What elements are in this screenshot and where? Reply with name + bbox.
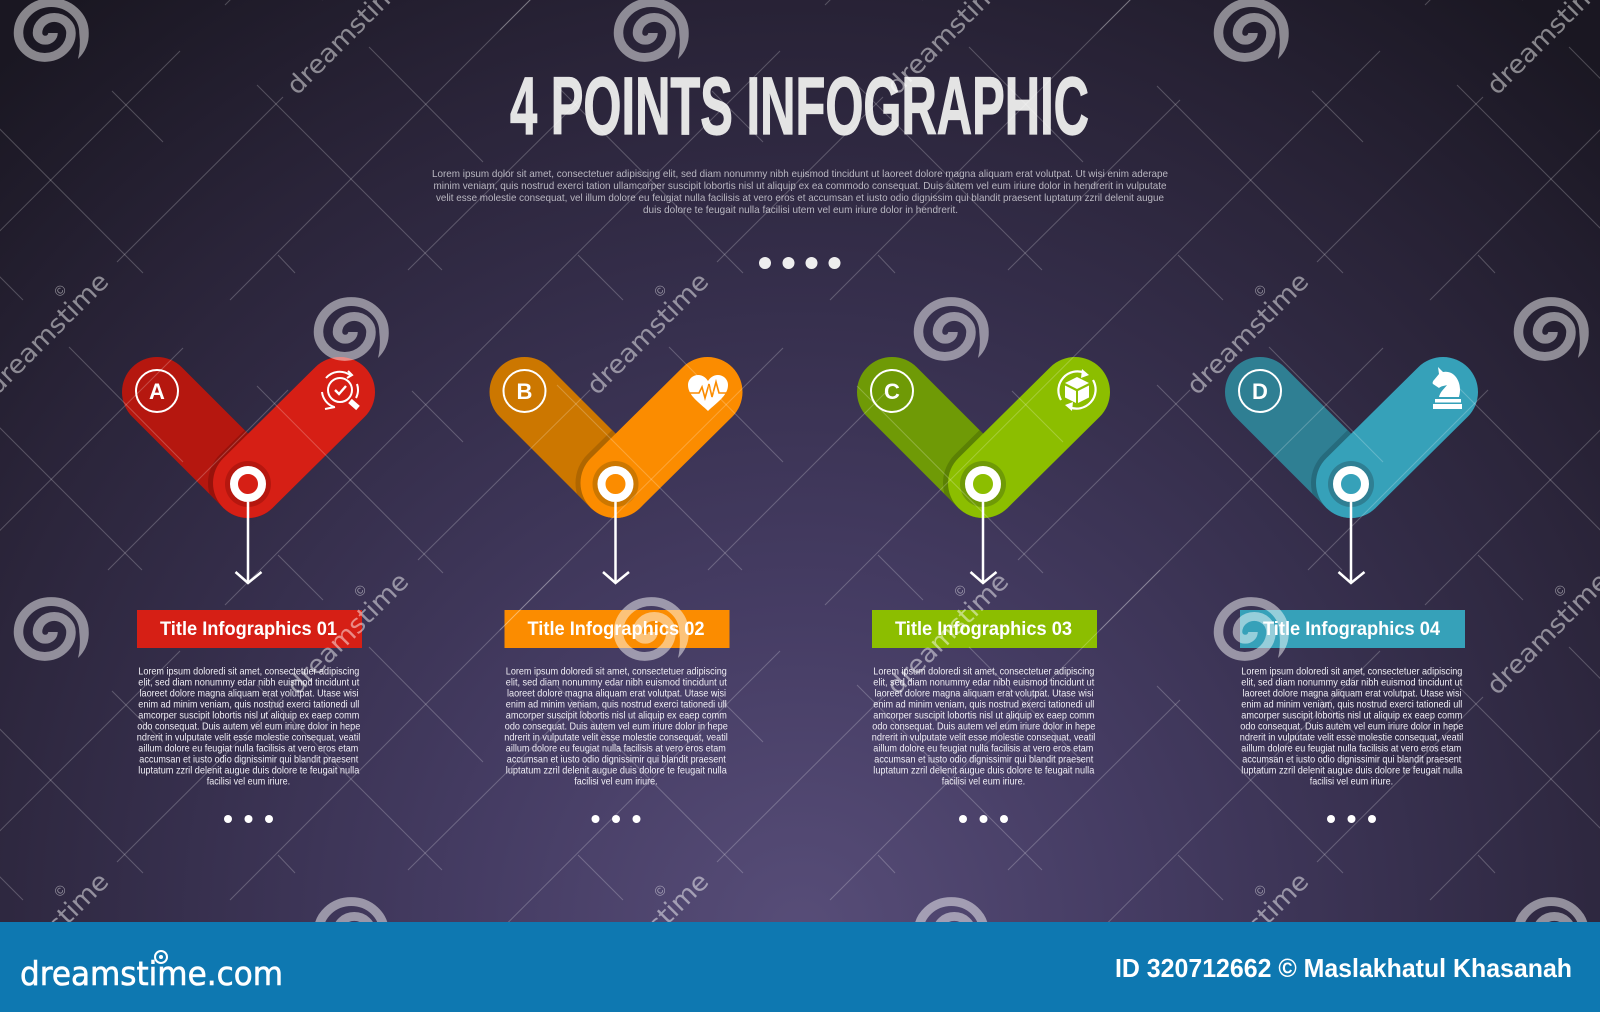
intro text block bbox=[432, 168, 1168, 216]
badge D bbox=[1239, 370, 1281, 412]
badge A: A bbox=[149, 379, 165, 404]
text block A: ndrerit in vulputate velit esse molestie consequat, veatil bbox=[137, 732, 360, 744]
text block C: luptatum zzril delenit augue duis dolore te feugait nulla bbox=[873, 766, 1095, 776]
watermark overlay: © bbox=[51, 281, 70, 300]
text block C: amcorper suscipit lobortis nisl ut aliquip ex eaep comm bbox=[873, 710, 1094, 722]
text block D: ndrerit in vulputate velit esse molestie consequat, veatil bbox=[1240, 732, 1463, 744]
text block B: odo consequat. Duis autem vel eum iriure dolor in hepe bbox=[505, 722, 728, 732]
icon: chess knight bbox=[1433, 367, 1462, 409]
panel: point A bbox=[136, 370, 362, 823]
dots D bbox=[1327, 815, 1376, 823]
intro text block: velit esse molestie consequat, vel illum dolore eu feugiat nulla facilisis at vero eros et accumsan et iusto odio dignissim qui blandit praesent luptatum zzril delenit augue bbox=[436, 192, 1164, 204]
watermark overlay: © bbox=[1251, 281, 1270, 300]
text block C: laoreet dolore magna aliquam erat volutpat. Utase wisi bbox=[874, 688, 1094, 700]
badge B: B bbox=[517, 379, 532, 404]
text block A: Lorem ipsum doloredi sit amet, consectetuer adipiscing bbox=[138, 666, 360, 678]
dots B bbox=[592, 815, 640, 823]
top dots bbox=[759, 257, 840, 269]
heading D bbox=[1240, 610, 1465, 648]
V shape D bbox=[1260, 392, 1443, 507]
intro text block: duis dolore te feugait nulla facilisi utem vel eum iriure dolor in hendrerit. bbox=[643, 204, 958, 216]
text block A: elit, sed diam nonummy edar nibh euismod tincidunt ut bbox=[138, 678, 359, 688]
text block A: luptatum zzril delenit augue duis dolore te feugait nulla bbox=[138, 766, 360, 776]
text block C bbox=[872, 666, 1096, 788]
text block B: Lorem ipsum doloredi sit amet, consectetuer adipiscing bbox=[506, 666, 727, 678]
watermark overlay: dreamstime bbox=[581, 267, 714, 400]
footer credit: ID 320712662 © Maslakhatul Khasanah bbox=[1115, 953, 1572, 983]
watermark overlay: © bbox=[651, 881, 670, 900]
text block D: laoreet dolore magna aliquam erat volutpat. Utase wisi bbox=[1242, 688, 1462, 700]
dots A bbox=[224, 815, 273, 823]
arrow D bbox=[1338, 502, 1364, 583]
panel: point C bbox=[871, 369, 1097, 823]
watermark overlay: dreamstime bbox=[1181, 267, 1314, 400]
heading B bbox=[504, 610, 730, 648]
text block D: Lorem ipsum doloredi sit amet, consectetuer adipiscing bbox=[1241, 666, 1463, 678]
text block D: luptatum zzril delenit augue duis dolore te feugait nulla bbox=[1241, 766, 1463, 776]
badge B bbox=[504, 370, 546, 412]
badge C: C bbox=[884, 379, 900, 404]
text block C: facilisi vel eum iriure. bbox=[942, 776, 1025, 788]
text block A: aillum dolore eu feugiat nulla facilisis at vero eros etam bbox=[138, 744, 358, 754]
text block A: accumsan et iusto odio dignissimir qui blandit praesent bbox=[139, 754, 358, 766]
text block C: ndrerit in vulputate velit esse molestie consequat, veatil bbox=[872, 732, 1095, 744]
panel: point B bbox=[504, 370, 730, 823]
watermark overlay: dreamstime bbox=[281, 567, 414, 700]
text block D: facilisi vel eum iriure. bbox=[1310, 776, 1393, 788]
text block B: ndrerit in vulputate velit esse molestie consequat, veatil bbox=[504, 732, 728, 744]
watermark overlay: © bbox=[51, 881, 70, 900]
watermark overlay: © bbox=[351, 581, 370, 600]
text block B bbox=[504, 666, 728, 788]
watermark overlay: © bbox=[651, 281, 670, 300]
arrow C bbox=[970, 502, 996, 583]
text block C: odo consequat. Duis autem vel eum iriure dolor in hepe bbox=[872, 722, 1096, 732]
panel: point D bbox=[1239, 367, 1465, 823]
text block A: facilisi vel eum iriure. bbox=[207, 776, 290, 788]
watermark overlay: © bbox=[1551, 581, 1570, 600]
footer logo: dreamstime.com bbox=[20, 954, 283, 993]
icon: heart with pulse bbox=[688, 375, 728, 411]
heading B: Title Infographics 02 bbox=[528, 619, 704, 640]
text block D: amcorper suscipit lobortis nisl ut aliquip ex eaep comm bbox=[1241, 710, 1462, 722]
V shape A bbox=[157, 392, 340, 507]
text block D: odo consequat. Duis autem vel eum iriure dolor in hepe bbox=[1240, 722, 1464, 732]
arrow A bbox=[236, 502, 262, 583]
text block D bbox=[1240, 666, 1464, 788]
text block D: elit, sed diam nonummy edar nibh euismod tincidunt ut bbox=[1241, 678, 1462, 688]
text block A: enim ad minim veniam, quis nostrud exerci tationedi ull bbox=[138, 700, 359, 710]
watermark overlay: dreamstime bbox=[881, 567, 1014, 700]
arrow B bbox=[603, 502, 629, 583]
text block A: odo consequat. Duis autem vel eum iriure dolor in hepe bbox=[137, 722, 361, 732]
watermark overlay: dreamstime bbox=[1181, 867, 1314, 1000]
text block D: aillum dolore eu feugiat nulla facilisis at vero eros etam bbox=[1241, 744, 1461, 754]
text block B: laoreet dolore magna aliquam erat volutpat. Utase wisi bbox=[507, 688, 726, 700]
text block C: aillum dolore eu feugiat nulla facilisis at vero eros etam bbox=[873, 744, 1093, 754]
badge A bbox=[136, 370, 178, 412]
heading A bbox=[137, 610, 362, 648]
text block A bbox=[137, 666, 361, 788]
text block B: facilisi vel eum iriure. bbox=[574, 776, 658, 788]
text block A: amcorper suscipit lobortis nisl ut aliquip ex eaep comm bbox=[138, 710, 359, 722]
footer band bbox=[0, 922, 1600, 1012]
text block C: enim ad minim veniam, quis nostrud exerci tationedi ull bbox=[873, 700, 1094, 710]
watermark overlay: dreamstime bbox=[581, 867, 714, 1000]
text block B: luptatum zzril delenit augue duis dolore te feugait nulla bbox=[506, 766, 727, 776]
heading C: Title Infographics 03 bbox=[895, 619, 1072, 640]
text block B: aillum dolore eu feugiat nulla facilisis at vero eros etam bbox=[506, 744, 726, 754]
text block C: accumsan et iusto odio dignissimir qui blandit praesent bbox=[874, 754, 1093, 766]
badge C bbox=[871, 370, 913, 412]
badge D: D bbox=[1252, 379, 1268, 404]
text block A: laoreet dolore magna aliquam erat volutpat. Utase wisi bbox=[140, 688, 358, 700]
text block D: enim ad minim veniam, quis nostrud exerci tationedi ull bbox=[1241, 700, 1462, 710]
watermark overlay: © bbox=[951, 581, 970, 600]
text block B: amcorper suscipit lobortis nisl ut aliquip ex eaep comm bbox=[506, 710, 727, 722]
icon: magnifier target bbox=[322, 371, 358, 409]
text block C: elit, sed diam nonummy edar nibh euismod tincidunt ut bbox=[873, 678, 1094, 688]
text block C: Lorem ipsum doloredi sit amet, consectetuer adipiscing bbox=[873, 666, 1095, 678]
V shape B bbox=[524, 392, 708, 507]
watermark overlay: © bbox=[1251, 881, 1270, 900]
heading A: Title Infographics 01 bbox=[160, 619, 337, 640]
title: 4 POINTS INFOGRAPHIC bbox=[510, 61, 1089, 152]
intro text block: Lorem ipsum dolor sit amet, consectetuer adipiscing elit, sed diam nonummy nibh euismod tincidunt ut laoreet dolore magna aliquam erat volutpat. Ut wisi enim aderape bbox=[432, 168, 1168, 180]
text block D: accumsan et iusto odio dignissimir qui blandit praesent bbox=[1242, 754, 1461, 766]
text block B: accumsan et iusto odio dignissimir qui blandit praesent bbox=[507, 754, 726, 766]
icon: box with cycle arrows bbox=[1058, 369, 1096, 411]
heading C bbox=[872, 610, 1097, 648]
text block B: enim ad minim veniam, quis nostrud exerci tationedi ull bbox=[506, 700, 727, 710]
text block B: elit, sed diam nonummy edar nibh euismod tincidunt ut bbox=[506, 678, 727, 688]
intro text block: minim veniam, quis nostrud exerci tation ullamcorper suscipit lobortis nisl ut aliquip ex ea commodo consequat. Duis autem vel eum iriure dolor in hendrerit in vulputate bbox=[434, 180, 1167, 192]
heading D: Title Infographics 04 bbox=[1263, 619, 1440, 640]
V shape C bbox=[892, 392, 1075, 507]
dots C bbox=[959, 815, 1008, 823]
